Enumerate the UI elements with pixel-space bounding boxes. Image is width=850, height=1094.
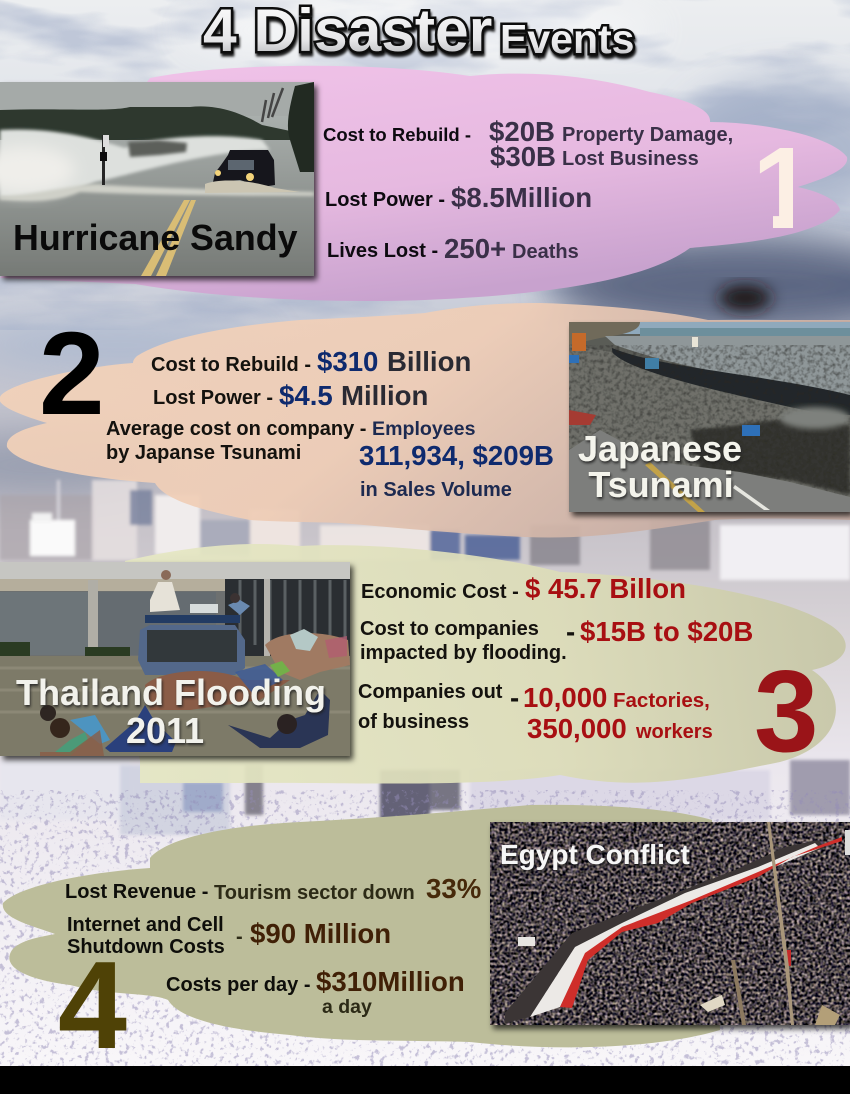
stat: companies out of business: Companies out (358, 681, 503, 703)
stat: cost to rebuild: Cost to Rebuild - (323, 124, 471, 145)
stat: average cost on company: by Japanse Tsunami (106, 442, 301, 464)
stat: economic cost: $ 45.7 Billon (525, 573, 686, 604)
stat: lost power: $8.5Million (451, 182, 592, 213)
stat: costs per day: $310Million (316, 966, 465, 997)
stat: cost to companies: impacted by flooding. (360, 642, 567, 664)
stat: costs per day (166, 966, 465, 1018)
stat: lives lost: 250+ (444, 233, 506, 264)
stat: lost power (325, 182, 592, 213)
panel: Japanese Tsunami (0, 303, 850, 538)
stat: companies out of business: of business (358, 711, 469, 733)
stat: cost to companies: - (566, 616, 575, 647)
photo label: Tsunami (588, 464, 734, 505)
stat: cost to rebuild: Lost Business (562, 148, 699, 170)
panel: Thailand Flooding (0, 544, 846, 784)
photo label: 2011 (126, 710, 204, 751)
stat: companies out of business: 10,000 (523, 682, 607, 713)
stat: cost to rebuild (323, 116, 733, 172)
number 4: 4 (58, 937, 127, 1075)
stat: cost to rebuild: Property Damage, (562, 124, 733, 146)
title: Events (500, 16, 634, 62)
stat: companies out of business: - (510, 682, 519, 713)
panel: Hurricane Sandy (0, 66, 847, 301)
stat: average cost on company: Employees (372, 418, 476, 440)
photo label (16, 672, 326, 751)
stat: cost to rebuild (151, 346, 471, 377)
stat: internet and cell shutdown: $90 Million (250, 918, 391, 949)
stat: costs per day: Costs per day - (166, 974, 310, 996)
title (203, 0, 634, 64)
stat: lost power: Lost Power - (153, 387, 273, 409)
stat: average cost on company: in Sales Volume (360, 479, 512, 501)
stat: average cost on company: 311,934, $209B (359, 440, 554, 471)
number 2: 2 (39, 308, 105, 440)
stat: companies out of business: workers (635, 721, 713, 743)
stat: cost to rebuild: Billion (387, 346, 471, 377)
stat: internet and cell shutdown: Internet and Cell (67, 914, 224, 936)
stat: internet and cell shutdown (67, 914, 391, 958)
photo: crowd with flag (490, 822, 850, 1025)
stat: internet and cell shutdown: Shutdown Costs (67, 936, 225, 958)
stat: lost power: $4.5 (279, 380, 333, 411)
photo label: Japanese (578, 428, 742, 469)
stat: lives lost: Deaths (512, 241, 579, 263)
stat: companies out of business: 350,000 (527, 713, 627, 744)
stat: cost to rebuild: $20B (489, 116, 555, 147)
stat: lost revenue: Tourism sector down (214, 882, 415, 904)
photo label (578, 428, 742, 505)
stat: lost revenue: Lost Revenue - (65, 881, 208, 903)
photo label: Egypt Conflict (500, 839, 690, 870)
stat: cost to companies: Cost to companies (360, 618, 539, 640)
peach cloud blob (0, 303, 850, 538)
panel: Egypt Conflict (3, 805, 850, 1075)
number 3: 3 (754, 646, 819, 776)
photo label: Hurricane Sandy (13, 218, 298, 258)
photo: flooded road with truck (0, 82, 314, 276)
stat: internet and cell shutdown: - (236, 926, 243, 948)
stat: cost to rebuild: $310 (317, 346, 378, 377)
stat: cost to companies: $15B to $20B (580, 616, 753, 647)
stat: lost revenue (65, 873, 481, 904)
photo: tsunami wave (569, 322, 850, 512)
photo: flooded street with truck (0, 562, 350, 756)
olive cloud blob (3, 805, 720, 1047)
stat: companies out of business (358, 681, 713, 744)
pink cloud blob (0, 66, 847, 301)
stat: lives lost: Lives Lost - (327, 240, 438, 262)
stat: cost to rebuild: Cost to Rebuild - (151, 354, 311, 376)
stat: average cost on company: Average cost on company - (106, 418, 366, 440)
footer black bar (0, 1066, 850, 1094)
stat: economic cost: Economic Cost - (361, 581, 519, 603)
stat: lives lost (327, 233, 579, 264)
stat: lost power (153, 380, 428, 411)
number 1: 1 (752, 123, 817, 253)
stat: lost revenue: 33% (426, 873, 481, 904)
stat: companies out of business: Factories, (613, 689, 710, 712)
stat: economic cost (361, 573, 686, 604)
olive cloud blob (125, 544, 846, 784)
stat: costs per day: a day (322, 996, 372, 1018)
stat: average cost on company (106, 418, 554, 501)
stat: cost to companies (360, 616, 753, 664)
photo label: Thailand Flooding (16, 672, 326, 713)
stat: lost power: Million (341, 380, 428, 411)
stat: lost power: Lost Power - (325, 189, 445, 211)
stat: cost to rebuild: $30B (490, 141, 556, 172)
